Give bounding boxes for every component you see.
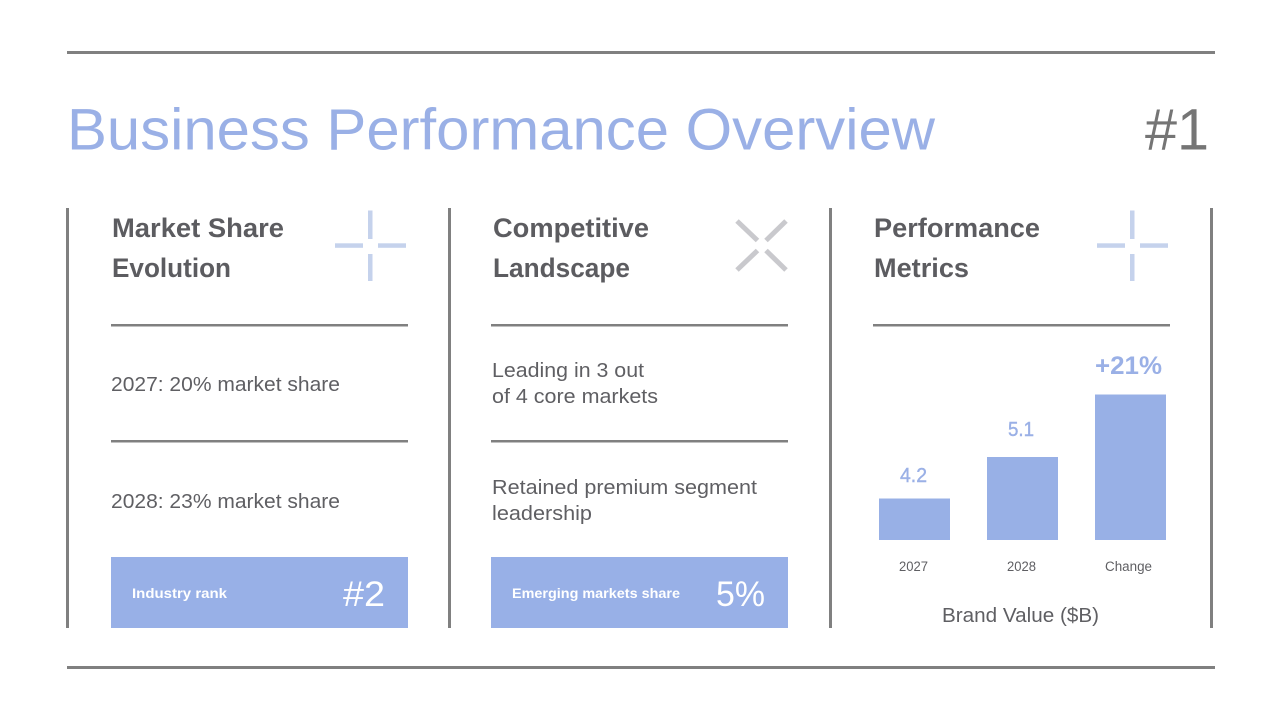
callout: emerging markets share: 5% [716, 575, 765, 614]
panel: performance metrics [873, 210, 1170, 627]
bar: 2027: 2027 [899, 559, 928, 574]
text: premium leadership: leadership [492, 503, 592, 525]
panel: market share evolution [111, 210, 408, 628]
callout: industry rank: Industry rank [132, 586, 228, 601]
callout: emerging markets share: Emerging markets share [512, 586, 681, 601]
bar: 2027 [879, 465, 950, 574]
text: leading markets: of 4 core markets [492, 386, 658, 408]
panel: competitive landscape [491, 213, 788, 628]
callout: industry rank [111, 557, 408, 628]
heading: market share evolution [112, 213, 284, 283]
bar: 2028 [987, 419, 1058, 574]
callout: industry rank: #2 [343, 575, 385, 614]
heading: performance metrics: Performance [874, 213, 1040, 243]
bar: change: Change [1105, 559, 1152, 574]
heading: performance metrics: Metrics [874, 253, 969, 283]
text: premium leadership [492, 477, 757, 525]
bar: 2027: 4.2 [900, 465, 927, 487]
text: 2028 share: 2028: 23% market share [111, 491, 340, 513]
bar chart: brand value [879, 352, 1166, 627]
text: premium leadership: Retained premium segment [492, 477, 757, 499]
bar: change: +21% [1095, 352, 1162, 380]
text: leading markets [492, 360, 658, 408]
heading: performance metrics [874, 213, 1040, 283]
bar: change [1095, 352, 1166, 574]
page number: #1 [1145, 98, 1209, 162]
callout: emerging markets share [491, 557, 788, 628]
title: Business Performance Overview [67, 98, 936, 162]
icon: plus marker [1097, 210, 1168, 281]
heading: market share evolution: Evolution [112, 253, 231, 283]
heading: competitive landscape [493, 213, 649, 283]
icon: cross marker [737, 221, 786, 270]
bar: 2028: 5.1 [1008, 419, 1034, 441]
chart caption: Brand Value ($B) [942, 605, 1099, 627]
heading: competitive landscape: Competitive [493, 213, 649, 243]
text: leading markets: Leading in 3 out [492, 360, 644, 382]
text: 2027 share: 2027: 20% market share [111, 374, 340, 396]
bar: 2028: 2028 [1007, 559, 1036, 574]
heading: market share evolution: Market Share [112, 213, 284, 243]
heading: competitive landscape: Landscape [493, 253, 630, 283]
icon: plus marker [335, 210, 406, 281]
